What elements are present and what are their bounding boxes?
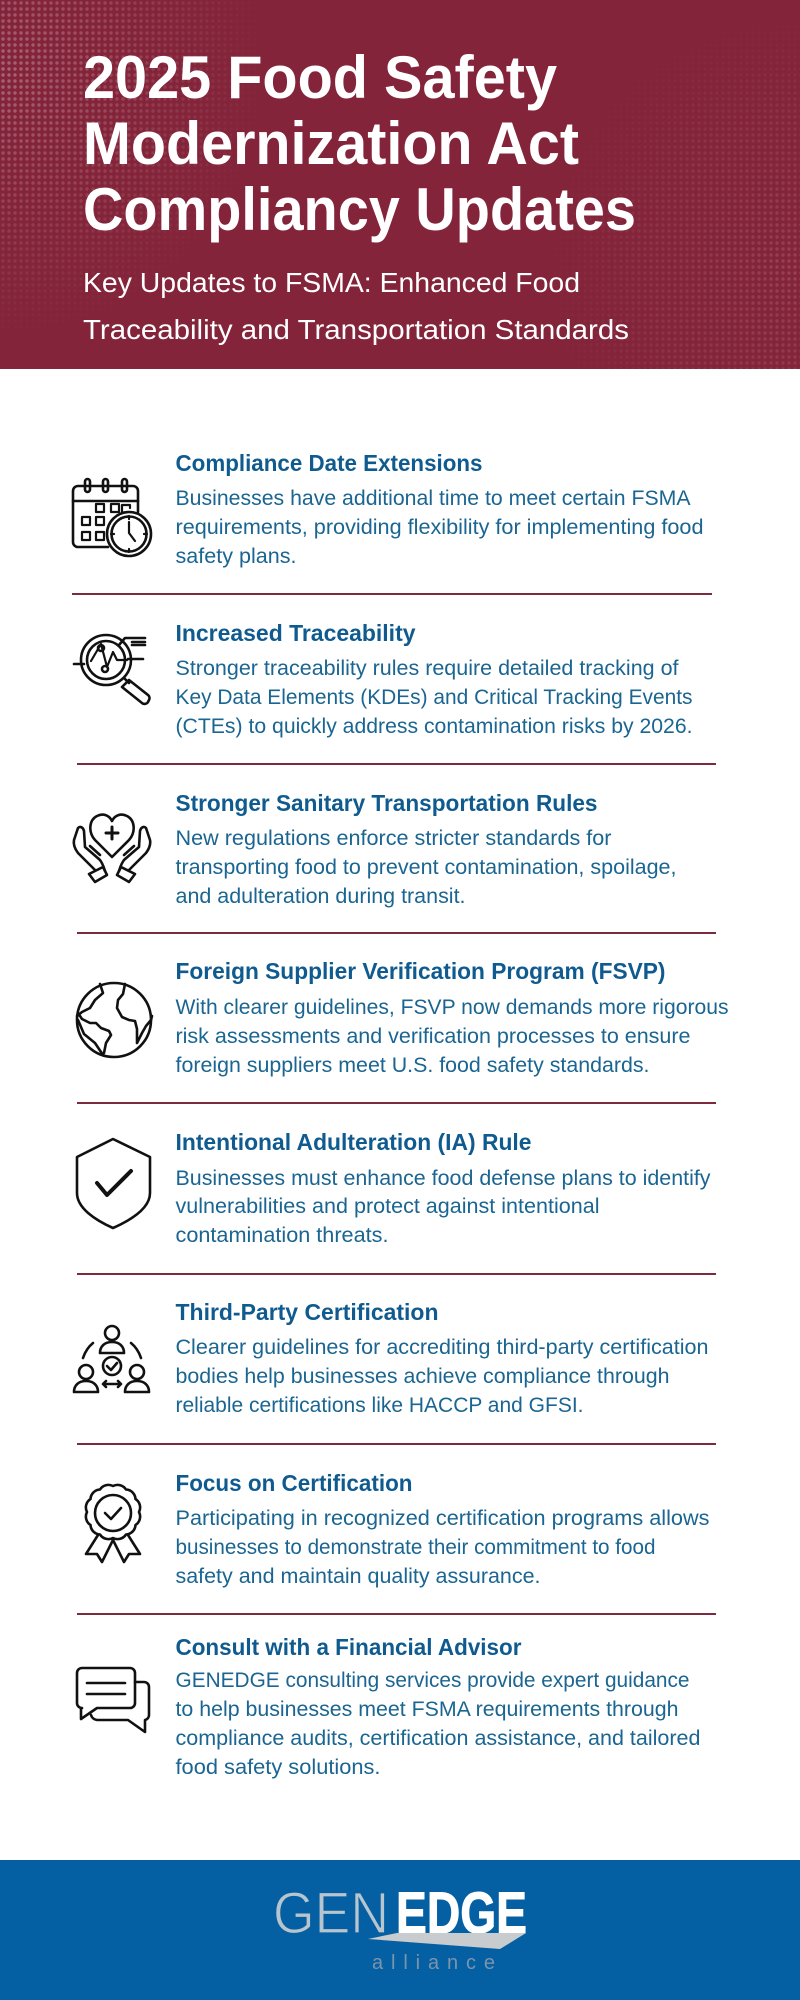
icon: hands holding heart: [74, 815, 150, 882]
text block: [176, 827, 676, 908]
text block: GENEDGE consulting services provide expert guidance: [176, 1669, 690, 1692]
panel: focus on certification: [86, 1470, 709, 1588]
text block: safety plans.: [176, 545, 296, 568]
text block: [176, 487, 704, 568]
text block: transporting food to prevent contamination, spoilage,: [176, 856, 676, 879]
text block: bodies help businesses achieve compliance through: [176, 1365, 670, 1388]
heading: Consult with a Financial Advisor: [176, 1634, 522, 1660]
heading: Foreign Supplier Verification Program (FSVP): [176, 958, 666, 984]
panel: consult with a financial advisor: [77, 1634, 700, 1779]
text block: compliance audits, certification assistance, and tailored: [176, 1727, 700, 1750]
logo: GENEDGE alliance: EDGE: [396, 1881, 527, 1946]
text block: (CTEs) to quickly address contamination risks by 2026.: [176, 715, 692, 738]
text block: [176, 996, 728, 1077]
panel: foreign supplier verification: [77, 958, 728, 1077]
title: Compliancy Updates: [83, 176, 636, 243]
text block: Businesses must enhance food defense plans to identify: [176, 1167, 711, 1190]
icon: magnifier with data chart: [74, 635, 149, 704]
heading: Increased Traceability: [176, 620, 416, 646]
logo: GENEDGE alliance: [273, 1881, 527, 1974]
text block: [176, 1507, 710, 1588]
text block: With clearer guidelines, FSVP now demands more rigorous: [176, 996, 728, 1019]
icon: globe: [77, 983, 152, 1057]
heading: Focus on Certification: [176, 1470, 412, 1496]
text block: and adulteration during transit.: [176, 885, 466, 908]
text block: vulnerabilities and protect against intentional: [176, 1195, 600, 1218]
text block: to help businesses meet FSMA requirements through: [176, 1698, 678, 1721]
text block: foreign suppliers meet U.S. food safety standards.: [176, 1054, 650, 1077]
text block: [176, 1167, 711, 1247]
subtitle: [83, 267, 629, 345]
text block: safety and maintain quality assurance.: [176, 1565, 540, 1588]
subtitle: Traceability and Transportation Standards: [83, 314, 629, 345]
logo: GENEDGE alliance: alliance: [372, 1952, 495, 1974]
title: Modernization Act: [83, 110, 579, 177]
panel: increased traceability: [74, 620, 692, 738]
heading: Compliance Date Extensions: [176, 450, 482, 476]
panel: sanitary transportation rules: [74, 790, 676, 908]
icon: calendar with clock: [73, 479, 151, 556]
heading: Intentional Adulteration (IA) Rule: [176, 1129, 532, 1155]
text block: Businesses have additional time to meet certain FSMA: [176, 487, 690, 510]
panel: compliance date extensions: [73, 450, 704, 568]
subtitle: Key Updates to FSMA: Enhanced Food: [83, 267, 580, 298]
icon: shield with check: [77, 1139, 150, 1228]
text block: Key Data Elements (KDEs) and Critical Tracking Events: [176, 686, 692, 709]
text block: [176, 1669, 700, 1779]
panel: intentional adulteration: [77, 1129, 711, 1247]
text block: requirements, providing flexibility for implementing food: [176, 516, 704, 539]
text block: reliable certifications like HACCP and GFSI.: [176, 1394, 584, 1417]
icon: people with check: [74, 1326, 149, 1392]
text block: businesses to demonstrate their commitment to food: [176, 1536, 656, 1559]
icon: chat bubbles: [77, 1668, 149, 1732]
heading: Stronger Sanitary Transportation Rules: [176, 790, 598, 816]
heading: Third-Party Certification: [176, 1299, 438, 1325]
text block: [176, 1336, 708, 1417]
text block: Clearer guidelines for accrediting third-party certification: [176, 1336, 708, 1359]
text block: risk assessments and verification processes to ensure: [176, 1025, 690, 1048]
logo: GENEDGE alliance: GEN: [273, 1881, 389, 1946]
text block: Participating in recognized certification programs allows: [176, 1507, 710, 1530]
text block: New regulations enforce stricter standards for: [176, 827, 612, 850]
text block: contamination threats.: [176, 1224, 388, 1247]
header banner: [0, 0, 800, 369]
text block: [176, 657, 692, 738]
footer band: [0, 1860, 800, 2000]
text block: Stronger traceability rules require detailed tracking of: [176, 657, 679, 680]
title: 2025 Food Safety: [83, 44, 558, 111]
title: [83, 44, 636, 243]
text block: food safety solutions.: [176, 1756, 380, 1779]
icon: award ribbon: [86, 1485, 140, 1562]
panel: third-party certification: [74, 1299, 708, 1417]
